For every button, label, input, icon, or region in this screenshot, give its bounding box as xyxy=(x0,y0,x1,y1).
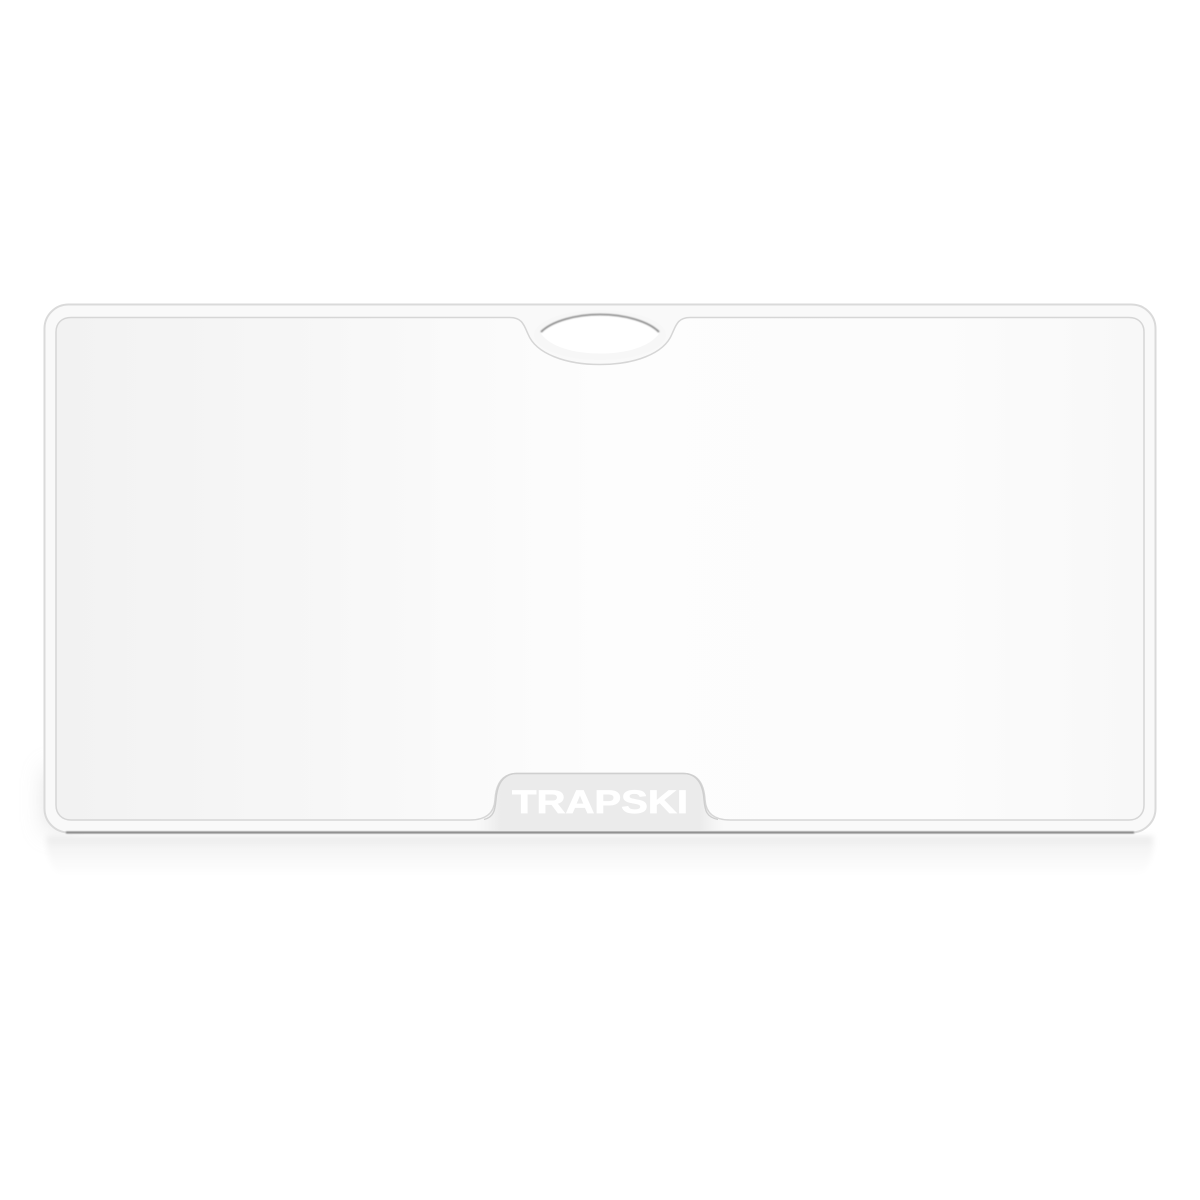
logo wordmark: TRAPSKI xyxy=(512,784,688,820)
hole rim xyxy=(534,310,666,360)
oval hole xyxy=(534,310,666,360)
hole opening xyxy=(540,314,660,354)
logo tab xyxy=(476,774,724,831)
logo tab outline xyxy=(484,774,718,820)
plate bottom edge shadow xyxy=(66,832,1134,834)
left side glow shadow xyxy=(46,770,70,830)
plate outer body xyxy=(44,304,1156,832)
floor reflection xyxy=(47,836,1153,876)
recessed inner panel with notch xyxy=(56,318,1144,820)
hole top shadow xyxy=(541,314,659,332)
